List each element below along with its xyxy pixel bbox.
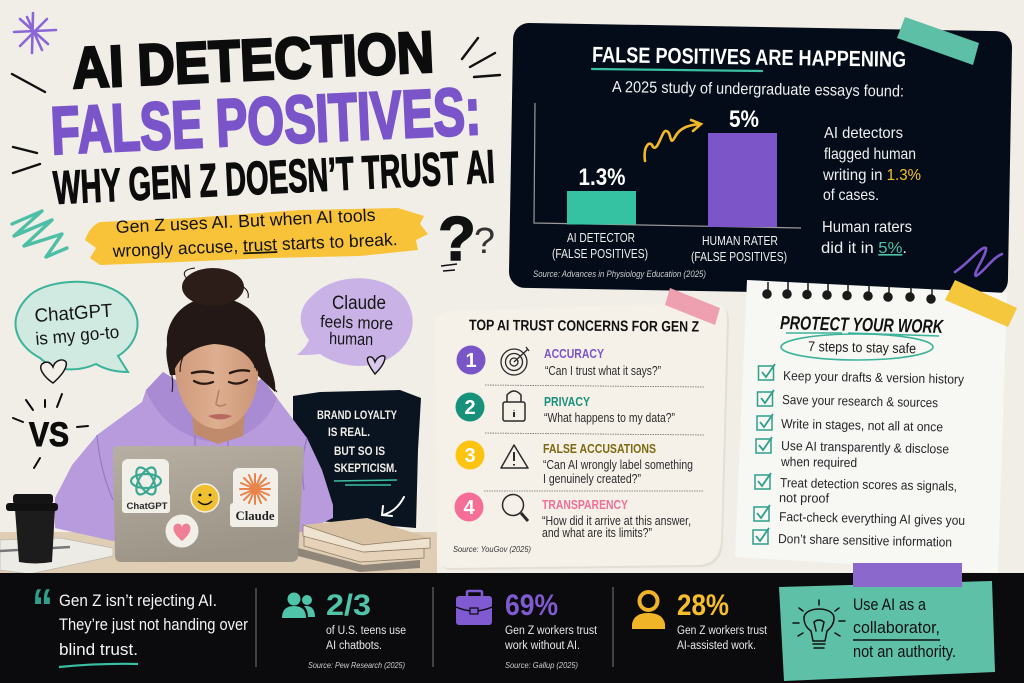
concern 3: false accusations: I genuinely created?” (543, 472, 641, 486)
panel heading: FALSE POSITIVES ARE HAPPENING (592, 42, 906, 72)
icon: teal squiggle (12, 211, 67, 257)
stat: 69%: work without AI. (504, 640, 580, 652)
checklist: Treat detection scores as signals, (780, 475, 957, 494)
concern 3: false accusations: “Can AI wrongly label something (543, 458, 693, 472)
notebook on desk (0, 538, 113, 574)
collaborator note (779, 581, 995, 681)
icon: people (282, 592, 315, 618)
side text: Human raters (822, 219, 912, 236)
yellow subtitle banner (85, 205, 428, 265)
steps oval (781, 334, 933, 360)
checklist: Save your research & sources (782, 392, 939, 410)
bar chart (534, 103, 801, 264)
subtitle text: Gen Z uses AI. But when AI tools (115, 205, 376, 237)
brand loyalty callout: BRAND LOYALTY (317, 410, 397, 422)
chatgpt speech bubble: is my go-to (35, 322, 120, 349)
sticker: ChatGPT (122, 459, 170, 513)
concern 2: privacy (456, 391, 675, 425)
cup (6, 494, 58, 564)
bar chart: HUMAN RATER (702, 234, 778, 248)
checklist: when required (780, 454, 857, 470)
title (49, 20, 496, 214)
stat: 2/3: AI chatbots. (326, 640, 382, 652)
pull quote: Gen Z isn’t rejecting AI. (59, 591, 217, 610)
checklist: not proof (779, 490, 830, 506)
title line 1: AI DETECTION (71, 20, 435, 101)
bar: human rater (708, 133, 777, 227)
stat: 28% (632, 589, 768, 652)
tape: yellow (945, 280, 1017, 327)
icon: person (632, 592, 665, 629)
checklist: Write in stages, not all at once (781, 416, 943, 434)
bar: AI detector (567, 191, 636, 224)
side text: did it in 5%. (821, 240, 907, 257)
sticker: Claude: Claude (236, 508, 275, 523)
vs badge: VS (29, 416, 69, 454)
stat: 2/3: of U.S. teens use (326, 625, 406, 637)
books stack (298, 518, 430, 572)
bar chart: 1.3% (578, 164, 626, 191)
concern 1: accuracy: ACCURACY (544, 347, 605, 361)
side text (821, 125, 921, 257)
icon: question marks: ? (438, 205, 476, 274)
photo: student at laptop (0, 268, 437, 574)
chatgpt speech bubble: ChatGPT (34, 301, 114, 327)
concern 3: false accusations: FALSE ACCUSATIONS (543, 442, 656, 456)
source: Source: Advances in Physiology Education (2025) (533, 269, 706, 280)
face (175, 343, 258, 429)
stat: 2/3: 2/3 (326, 589, 371, 622)
stat: 69%: 69% (505, 589, 558, 622)
purple squiggle (955, 248, 1002, 276)
stat: 2/3: Source: Pew Research (2025) (308, 661, 405, 670)
icon: briefcase (456, 591, 492, 625)
collaborator note: collaborator, (853, 618, 940, 637)
claude speech bubble (297, 278, 413, 374)
claude speech bubble: human (329, 329, 373, 349)
stat: 2/3 (282, 589, 406, 670)
tape: purple (853, 563, 962, 587)
bar chart: 5% (729, 106, 759, 133)
bar chart: (FALSE POSITIVES) (691, 250, 787, 264)
panel: top AI trust concerns (435, 288, 729, 570)
vs badge (13, 394, 88, 468)
icon: heart outline (41, 360, 66, 383)
brand loyalty callout: SKEPTICISM. (334, 463, 397, 475)
arrow (382, 497, 404, 516)
concern 2: privacy: 2 (464, 397, 476, 419)
panel: protect your work notebook (735, 280, 1017, 573)
footer band (0, 563, 1024, 683)
icon: question marks (438, 205, 495, 274)
arrow: yellow squiggle (645, 120, 701, 161)
bar chart: AI DETECTOR (567, 231, 635, 245)
hoodie (55, 372, 333, 541)
claude speech bubble: Claude (332, 293, 386, 314)
stat: 28%: AI-assisted work. (677, 640, 756, 652)
brand loyalty callout: BUT SO IS (334, 446, 385, 458)
concern 4: transparency: TRANSPARENCY (542, 498, 629, 512)
checklist: Don’t share sensitive information (778, 531, 952, 550)
concern 1: accuracy (456, 346, 661, 378)
pull quote: They’re just not handing over (59, 615, 248, 634)
title line 2: FALSE POSITIVES: (49, 74, 482, 169)
tape: pink (665, 288, 720, 325)
concern 3: false accusations: 3 (464, 445, 476, 467)
concern 1: accuracy: “Can I trust what it says?” (545, 364, 661, 378)
spiral holes (763, 282, 935, 303)
hair bun (182, 268, 244, 306)
checklist (753, 364, 965, 550)
sticker: ChatGPT: ChatGPT (126, 501, 168, 512)
side text: of cases. (823, 187, 879, 204)
pull quote (32, 579, 248, 667)
pull quote: “ (32, 579, 53, 637)
claude speech bubble: feels more (320, 312, 393, 334)
sticker: smiley (191, 484, 219, 512)
steps oval: 7 steps to stay safe (808, 338, 916, 356)
nose and mouth (216, 390, 226, 406)
panel: false positives study (509, 17, 1012, 296)
collaborator note: Use AI as a (853, 595, 926, 614)
decorative ticks (12, 38, 500, 173)
stat: 69%: Gen Z workers trust (505, 625, 598, 637)
source: Source: YouGov (2025) (453, 544, 531, 554)
stat: 28%: 28% (677, 589, 729, 622)
stat: 28%: Gen Z workers trust (677, 625, 768, 637)
concern 4: transparency: and what are its limits?” (542, 526, 652, 540)
stat: 69%: Source: Gallup (2025) (505, 661, 578, 670)
concern 4: transparency (454, 492, 691, 540)
panel heading: TOP AI TRUST CONCERNS FOR GEN Z (469, 317, 699, 336)
yellow subtitle banner: wrongly accuse, trust starts to break. (111, 229, 398, 261)
pen (0, 547, 70, 551)
icon: question marks: ? (474, 220, 495, 261)
icon: purple star (14, 13, 56, 53)
eyes and brows (192, 370, 249, 384)
concern 2: privacy: PRIVACY (544, 395, 591, 409)
side text: AI detectors (824, 125, 903, 142)
chatgpt speech bubble (16, 282, 137, 383)
checklist: Keep your drafts & version history (783, 368, 965, 387)
notebook heading: PROTECT YOUR WORK (780, 313, 944, 338)
tape: teal (897, 17, 979, 65)
desk (0, 532, 437, 574)
concern 4: transparency: 4 (463, 497, 475, 519)
neck (192, 412, 245, 444)
collaborator note: not an authority. (853, 642, 956, 661)
checklist: Use AI transparently & disclose (781, 438, 949, 457)
panel subheading: A 2025 study of undergraduate essays found: (612, 79, 904, 101)
bar chart: (FALSE POSITIVES) (552, 247, 648, 261)
concern 2: privacy: “What happens to my data?” (544, 411, 675, 425)
laptop (113, 446, 304, 562)
sticker: Claude (230, 468, 278, 527)
icon: heart outline (367, 356, 385, 374)
hair back (166, 297, 275, 392)
sticker: heart (166, 514, 198, 548)
icon: light bulb (793, 600, 845, 648)
stat: 69% (456, 589, 598, 670)
checklist: Fact-check everything AI gives you (779, 509, 965, 528)
brand loyalty callout: IS REAL. (328, 427, 370, 439)
concern 4: transparency: “How did it arrive at this answer, (542, 514, 691, 528)
concern 3: false accusations (456, 440, 693, 486)
brand loyalty callout (293, 390, 421, 528)
side text: flagged human (824, 146, 916, 163)
title line 3: WHY GEN Z DOESN’T TRUST AI (52, 139, 496, 214)
side text: writing in 1.3% (822, 167, 921, 184)
hair fringe (169, 318, 260, 376)
pull quote: blind trust. (59, 640, 138, 659)
concern 1: accuracy: 1 (465, 350, 477, 372)
